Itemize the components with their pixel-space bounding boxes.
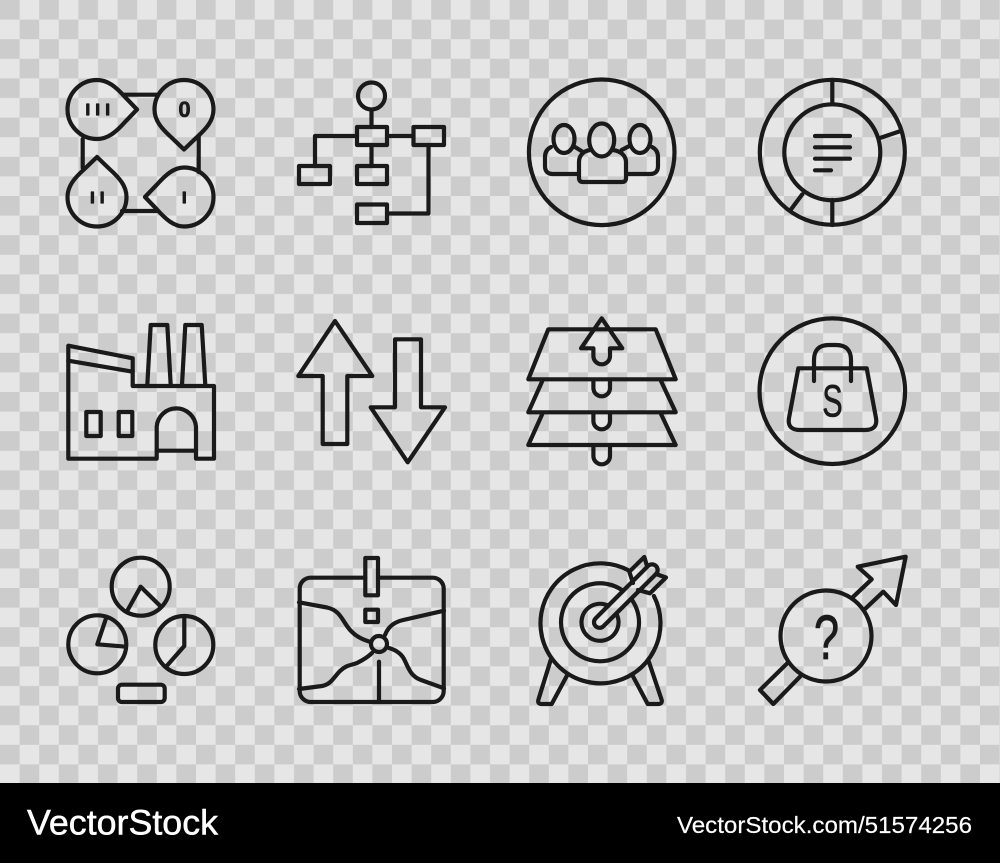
icon: up and down arrows — [298, 321, 445, 462]
footer band — [0, 783, 1000, 863]
icon: four numbered map pins on a square: III — [86, 102, 115, 119]
icon: shopping bag with S in a circle: S — [822, 377, 843, 427]
icon: archery target with arrow — [538, 557, 666, 704]
icon: road map with warning mark — [299, 558, 444, 702]
icon: question mark circle with arrow: ? — [814, 602, 839, 673]
icon: factory — [68, 325, 214, 459]
brand name: VectorStock — [27, 804, 219, 842]
icon: four numbered map pins on a square: I — [182, 190, 186, 207]
icon: shopping bag with S in a circle — [760, 318, 905, 464]
icon: four numbered map pins on a square: II — [90, 190, 110, 207]
icon: flowchart — [299, 82, 444, 223]
icon: team of three people in a circle — [529, 80, 674, 225]
icon: question mark circle with arrow — [760, 557, 906, 704]
icon: four numbered map pins on a square — [68, 80, 214, 226]
icon: donut chart with text lines — [760, 80, 905, 225]
icon: stacked layers with up arrow — [528, 318, 676, 464]
icon: four numbered map pins on a square: 0 — [178, 97, 191, 122]
image reference: VectorStock.com/51574256 — [677, 812, 972, 838]
icon: three pie charts with label — [68, 558, 213, 702]
